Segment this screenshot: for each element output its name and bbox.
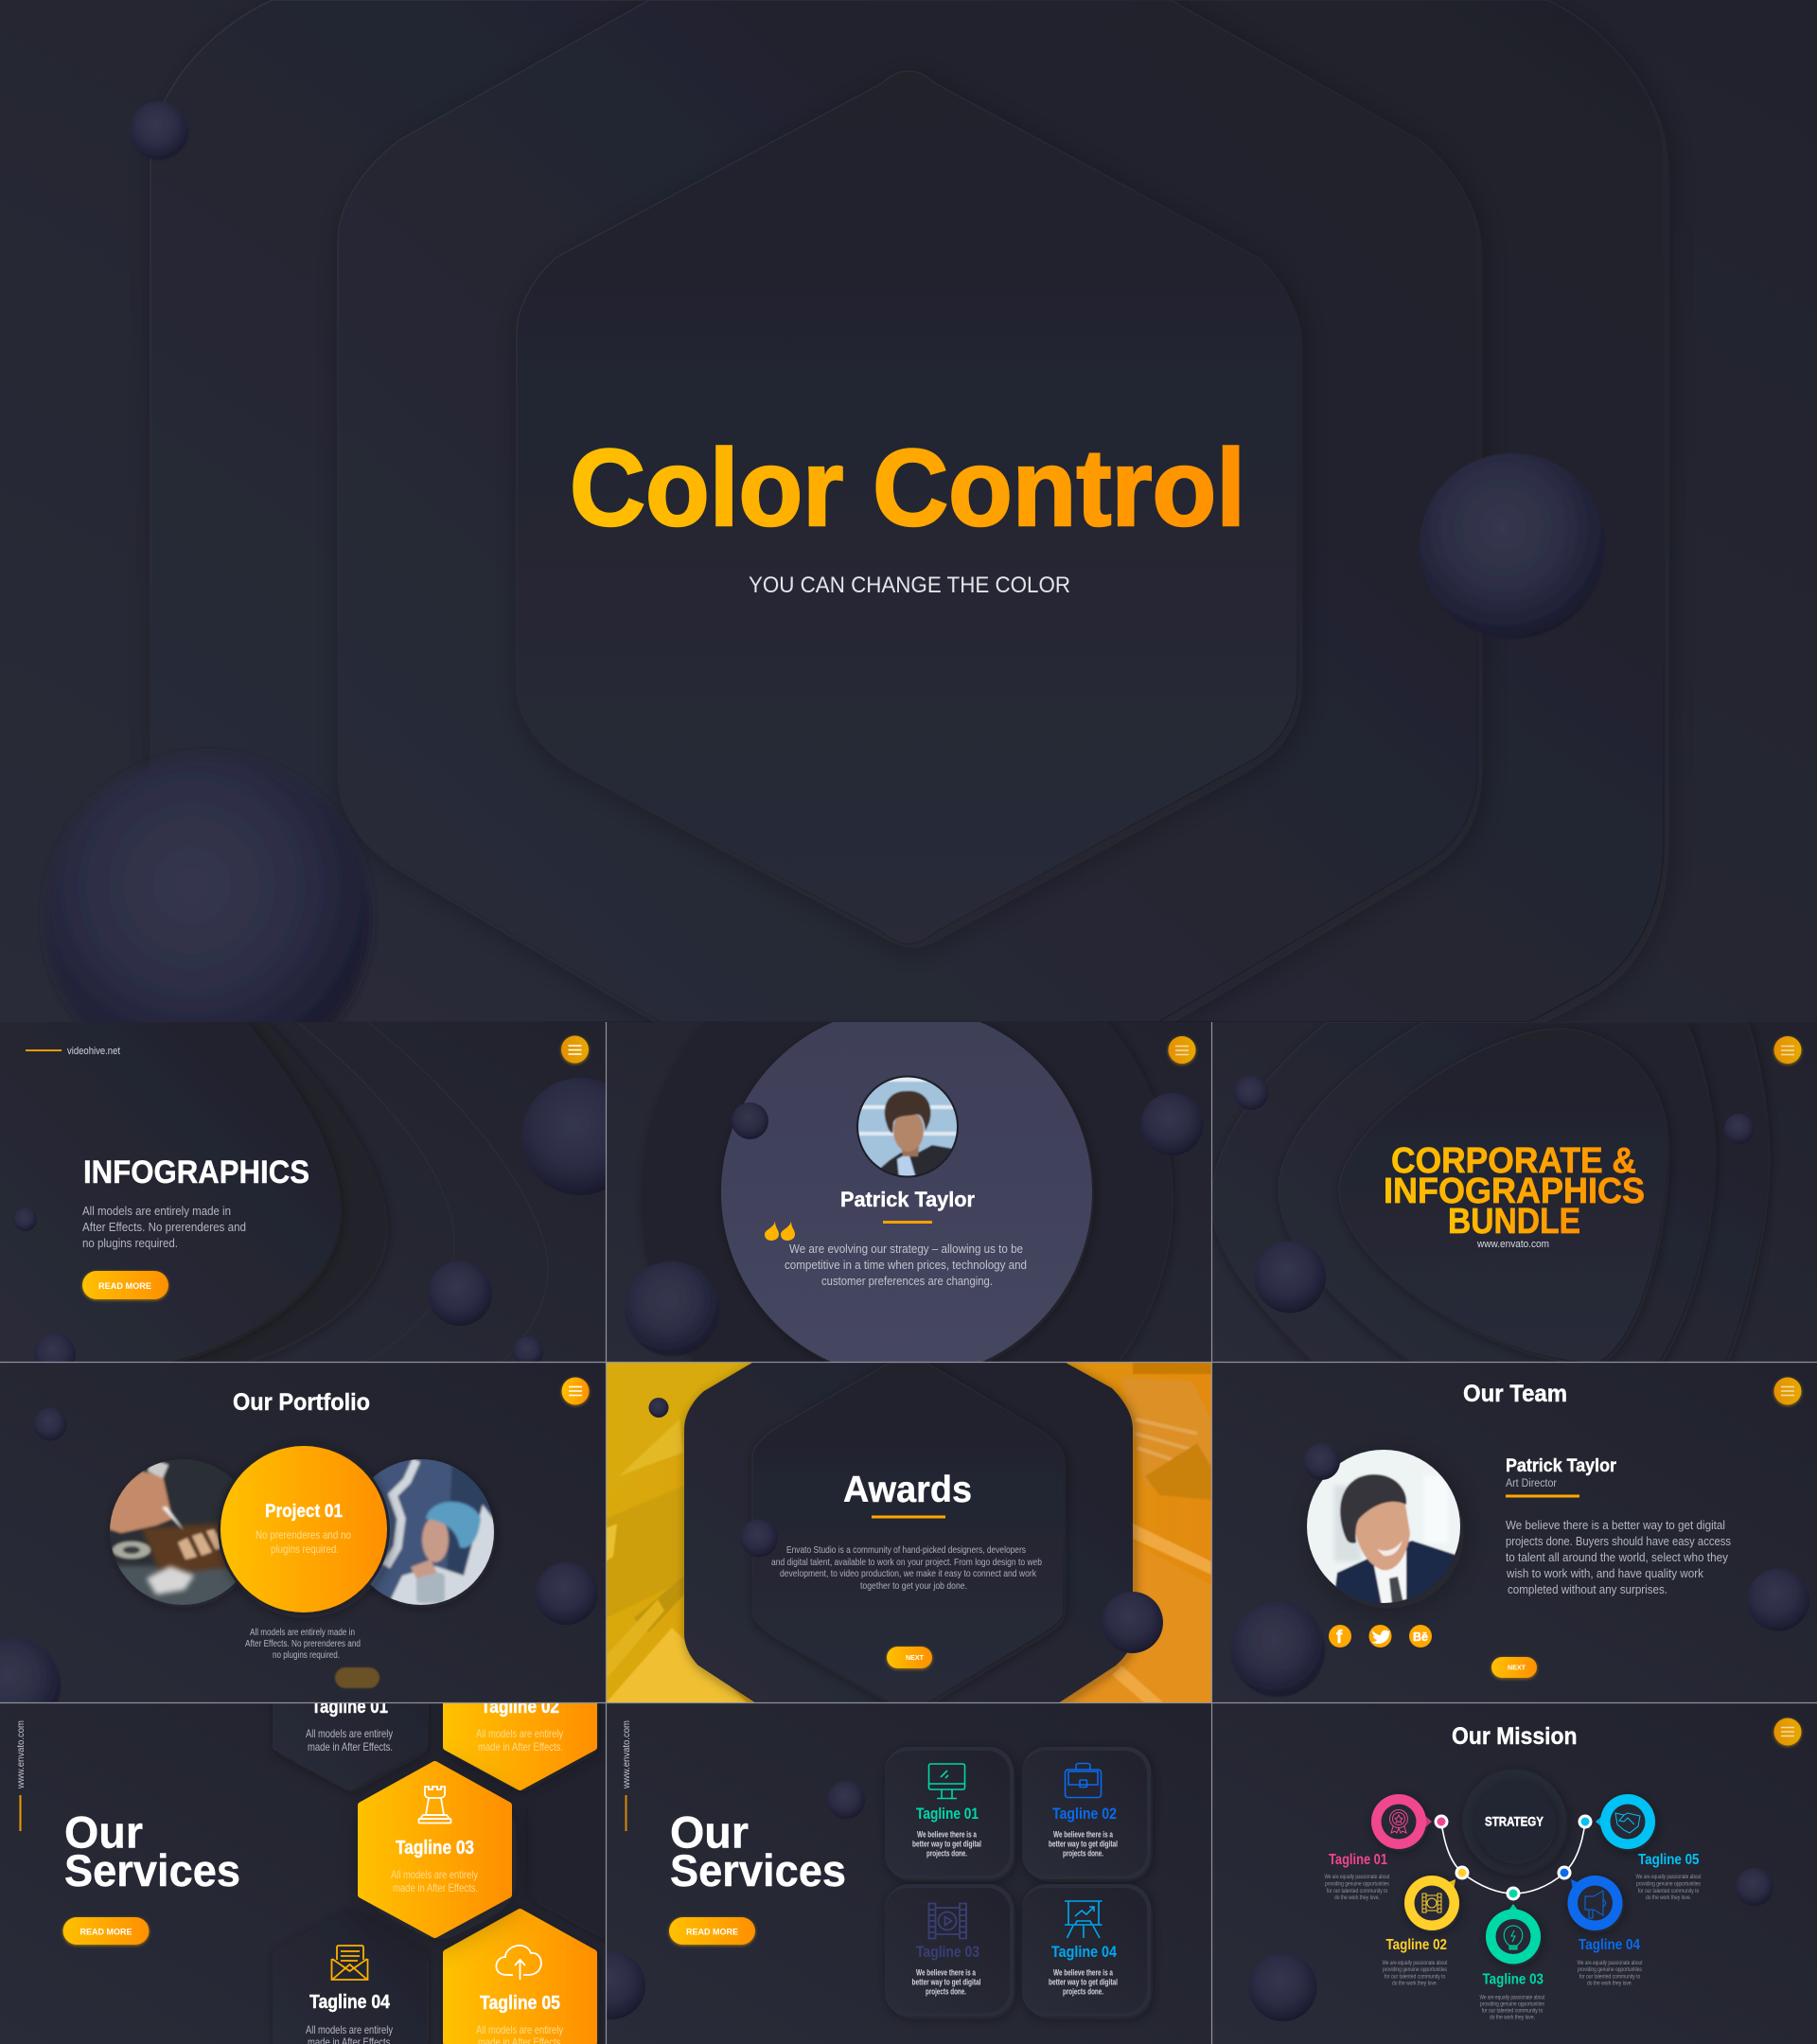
- bio: to talent all around the world, select who they: [1506, 1550, 1728, 1564]
- panel: team slide: [1213, 1376, 1808, 1701]
- headline: CORPORATE &: [1391, 1141, 1636, 1181]
- name: Patrick Taylor: [1506, 1456, 1617, 1476]
- icon: envelope: [331, 1946, 367, 1980]
- card 03: better way to get digital: [912, 1978, 980, 1987]
- icon: facebook: f: [1336, 1628, 1343, 1648]
- ring: tagline 03: [1486, 1904, 1541, 1965]
- card 04: projects done.: [1063, 1987, 1103, 1997]
- nodes: [1436, 1816, 1591, 1899]
- violet circle: [721, 1007, 1092, 1378]
- url: www.envato.com: [1476, 1239, 1549, 1250]
- vertical line: [19, 1795, 21, 1831]
- ring: tagline 05: [1596, 1794, 1655, 1849]
- inner hexagon layer: [517, 71, 1297, 944]
- panel: bundle slide: [1212, 1022, 1804, 1361]
- label: tagline 01: Tagline 01: [1329, 1852, 1387, 1868]
- heading: Awards: [843, 1470, 972, 1510]
- hexagon 01: made in After Effects.: [308, 1740, 393, 1753]
- outer hexagon: [684, 1363, 1133, 1703]
- label: tagline 05: for our talented community to: [1638, 1888, 1700, 1894]
- label: tagline 04: providing genuine opportunities: [1578, 1966, 1643, 1973]
- icon: award: [1389, 1809, 1408, 1833]
- hexagon 01: Tagline 01: [311, 1697, 388, 1718]
- menu button: [1168, 1036, 1196, 1064]
- quote text: competitive in a time when prices, technology and: [785, 1258, 1027, 1272]
- label: tagline 01: do the work they love.: [1334, 1894, 1380, 1901]
- label: tagline 01: We are equally passionate about: [1325, 1874, 1390, 1880]
- label: tagline 05: providing genuine opportunities: [1636, 1881, 1702, 1887]
- vertical line: [625, 1795, 626, 1831]
- hexagon 03: All models are entirely: [391, 1868, 478, 1881]
- card 04: [1022, 1884, 1151, 2017]
- heading: Our Portfolio: [233, 1389, 370, 1416]
- bio: We believe there is a better way to get digital: [1506, 1518, 1725, 1532]
- heading: Our: [64, 1807, 143, 1857]
- label: tagline 04: Tagline 04: [1579, 1937, 1640, 1953]
- next button: [1491, 1657, 1537, 1678]
- hexagon 02: [447, 1616, 593, 1787]
- icon: film: [929, 1904, 966, 1938]
- balls: [649, 1398, 1163, 1653]
- balls: [13, 1078, 639, 1375]
- ring: tagline 04: [1567, 1876, 1622, 1930]
- portrait: [856, 1075, 959, 1177]
- hexagon 02: All models are entirely: [476, 1727, 563, 1740]
- quote text: customer preferences are changing.: [821, 1274, 993, 1288]
- faded button: [335, 1667, 379, 1688]
- icon: monitor: [929, 1764, 965, 1798]
- menu button: [1773, 1378, 1802, 1404]
- card 01: Tagline 01: [916, 1805, 979, 1823]
- label: tagline 01: for our talented community to: [1327, 1888, 1388, 1894]
- hexagon 01: All models are entirely: [306, 1727, 393, 1740]
- title: Color Control: [570, 428, 1245, 549]
- heading: Services: [670, 1845, 846, 1895]
- ball over portrait: [1303, 1443, 1340, 1480]
- hexagon 05: All models are entirely: [476, 2023, 563, 2036]
- bio: projects done. Buyers should have easy access: [1506, 1534, 1731, 1548]
- panel: testimonial slide: [608, 1022, 1202, 1362]
- description: All models are entirely made in: [250, 1628, 355, 1638]
- label: tagline 02: [1382, 1937, 1448, 1987]
- photo background shapes: [606, 1363, 1211, 1703]
- body text: no plugins required.: [82, 1236, 178, 1250]
- panel: awards slide: [607, 1363, 1211, 1702]
- strategy hub: STRATEGY: [1485, 1813, 1544, 1828]
- icon: handshake: [1615, 1813, 1640, 1833]
- connector arc: [1441, 1822, 1585, 1894]
- inner blob: [1339, 1029, 1667, 1363]
- heading: [64, 1807, 240, 1895]
- headline: [1384, 1141, 1645, 1242]
- ring: tagline 02: [1404, 1876, 1459, 1930]
- icon: twitter: [1368, 1625, 1391, 1648]
- card 04: Tagline 04: [1051, 1943, 1117, 1961]
- hexagon: right dark: [532, 1765, 679, 1934]
- read more button: [62, 1917, 150, 1945]
- card 02: We believe there is a: [1053, 1830, 1114, 1840]
- card 01: We believe there is a: [917, 1830, 978, 1840]
- description: Envato Studio is a community of hand-picked designers, developers: [786, 1544, 1026, 1556]
- next button: [887, 1647, 932, 1668]
- hexagon 04: All models are entirely: [306, 2023, 393, 2036]
- body text: After Effects. No prerenderes and: [82, 1220, 246, 1234]
- icon: facebook: [1329, 1625, 1351, 1648]
- middle hexagon layer: [338, 0, 1477, 1022]
- description: together to get your job done.: [860, 1580, 967, 1592]
- heading: Our Mission: [1452, 1723, 1577, 1750]
- card 03: Tagline 03: [916, 1943, 979, 1961]
- menu button: [561, 1035, 589, 1064]
- label: tagline 01: providing genuine opportunities: [1325, 1881, 1390, 1887]
- label: tagline 04: We are equally passionate about: [1577, 1960, 1643, 1966]
- panel: services cards slide: [607, 1720, 1155, 2044]
- accent bar: [883, 1221, 932, 1224]
- menu button: [562, 1378, 589, 1404]
- headline: BUNDLE: [1448, 1202, 1580, 1242]
- description: [245, 1628, 361, 1661]
- icon: cloud upload: [496, 1946, 541, 1980]
- balls: [1230, 1569, 1809, 1697]
- heading: Our Team: [1463, 1381, 1567, 1407]
- accent bar: [1506, 1495, 1579, 1497]
- name: Patrick Taylor: [840, 1188, 975, 1211]
- bio: wish to work with, and have quality work: [1506, 1566, 1703, 1580]
- balls: [1234, 1076, 1755, 1313]
- label: tagline 03: for our talented community to: [1482, 2008, 1544, 2014]
- subtitle: YOU CAN CHANGE THE COLOR: [749, 573, 1070, 598]
- quote text: We are evolving our strategy – allowing us to be: [789, 1242, 1023, 1256]
- label: tagline 03: We are equally passionate about: [1480, 1995, 1545, 2000]
- label: tagline 05: Tagline 05: [1638, 1852, 1700, 1868]
- card 02: [1022, 1747, 1151, 1879]
- read more button: READ MORE: [686, 1927, 738, 1938]
- label: tagline 03: [1480, 1972, 1545, 2021]
- heading: [670, 1807, 846, 1895]
- hexagon 03: [362, 1765, 508, 1934]
- hexagon 03: made in After Effects.: [393, 1881, 478, 1894]
- card 01: projects done.: [926, 1849, 967, 1859]
- read more button: [669, 1917, 755, 1945]
- role: Art Director: [1506, 1478, 1557, 1489]
- panel: portfolio slide: [0, 1376, 596, 1702]
- description: no plugins required.: [273, 1650, 340, 1661]
- label: tagline 04: [1577, 1937, 1643, 1987]
- icon: behance: Bē: [1413, 1630, 1428, 1644]
- balls: [1249, 1868, 1773, 2021]
- blob band: [0, 1022, 386, 1363]
- quote mark: [765, 1221, 795, 1241]
- card 03: We believe there is a: [916, 1968, 977, 1978]
- card 04: We believe there is a: [1053, 1968, 1114, 1978]
- description: development, to video production, we make it easy to connect and work: [780, 1568, 1037, 1579]
- label: tagline 02: for our talented community to: [1385, 1974, 1446, 1980]
- read more button: READ MORE: [98, 1281, 151, 1292]
- panel: services hexagons slide: [0, 1697, 604, 2044]
- hexagon 05: Tagline 05: [480, 1993, 560, 2014]
- card 02: Tagline 02: [1052, 1805, 1117, 1823]
- hexagon 03: Tagline 03: [396, 1838, 474, 1859]
- left project photo: [110, 1459, 238, 1609]
- menu button: [1773, 1718, 1802, 1745]
- right project photo: [370, 1459, 496, 1609]
- site label: videohive.net: [67, 1046, 120, 1057]
- icon: behance: [1409, 1625, 1432, 1648]
- bottom left ball: [45, 755, 371, 1081]
- balls: [0, 1408, 598, 1733]
- panel: infographics slide: [0, 1022, 606, 1362]
- hexagon 02: made in After Effects.: [478, 1740, 563, 1753]
- menu button: [1773, 1036, 1802, 1064]
- label: tagline 04: for our talented community to: [1579, 1974, 1641, 1980]
- project circle: [218, 1443, 390, 1615]
- strategy hub: [1462, 1770, 1566, 1874]
- outer blob: [1211, 1022, 1768, 1363]
- next button: NEXT: [1508, 1664, 1526, 1671]
- project circle: plugins required.: [271, 1542, 339, 1556]
- card 02: better way to get digital: [1049, 1840, 1118, 1849]
- icon: bulb: [1504, 1926, 1523, 1949]
- label: tagline 05: [1635, 1852, 1702, 1901]
- card 01: better way to get digital: [912, 1840, 981, 1849]
- card 02: projects done.: [1063, 1849, 1103, 1859]
- bio: [1506, 1518, 1731, 1596]
- hexagon 04: Tagline 04: [309, 1992, 391, 2013]
- vertical url: www.envato.com: [621, 1720, 632, 1789]
- hexagon 04: [276, 1912, 423, 2044]
- icon: presentation board: [1065, 1901, 1102, 1938]
- card 04: better way to get digital: [1049, 1978, 1118, 1987]
- label: tagline 04: do the work they love.: [1587, 1980, 1632, 1987]
- label: tagline 02: do the work they love.: [1392, 1980, 1438, 1987]
- outer hexagon layer: [150, 0, 1664, 1022]
- label: tagline 03: do the work they love.: [1490, 2014, 1535, 2021]
- description: After Effects. No prerenderes and: [245, 1639, 361, 1649]
- card 03: projects done.: [926, 1987, 966, 1997]
- description: [771, 1544, 1042, 1592]
- label: tagline 03: providing genuine opportunities: [1480, 2000, 1545, 2008]
- label: tagline 01: [1325, 1852, 1390, 1901]
- label: tagline 02: We are equally passionate about: [1382, 1960, 1448, 1966]
- icon: rook: [418, 1787, 450, 1823]
- heading: INFOGRAPHICS: [83, 1154, 309, 1190]
- label: tagline 02: Tagline 02: [1385, 1937, 1447, 1953]
- contour lines: [297, 1022, 548, 1363]
- project circle: Project 01: [265, 1502, 343, 1522]
- icon: megaphone: [1585, 1891, 1605, 1918]
- label: tagline 05: We are equally passionate about: [1635, 1874, 1702, 1880]
- heading: Our: [670, 1807, 749, 1857]
- card 01: [885, 1747, 1014, 1879]
- middle blob: [1279, 1022, 1714, 1363]
- description: and digital talent, available to work on your project. From logo design to web: [771, 1557, 1042, 1568]
- inner hexagon: [752, 1363, 1064, 1703]
- project circle: No prerenderes and no: [256, 1528, 351, 1542]
- dark ring: [642, 927, 1172, 1467]
- panel: hero Color Control: [0, 0, 1664, 1022]
- team portrait: [1306, 1448, 1462, 1609]
- bio: completed without any surprises.: [1508, 1582, 1667, 1596]
- label: tagline 03: Tagline 03: [1482, 1972, 1544, 1987]
- next button: NEXT: [906, 1653, 924, 1662]
- icon: briefcase: [1066, 1764, 1102, 1798]
- quote text: [785, 1242, 1027, 1288]
- ring: tagline 01: [1371, 1794, 1432, 1849]
- panel: mission slide: [1213, 1717, 1804, 2044]
- right ball: [1420, 453, 1605, 639]
- hexagon 05: [447, 1912, 593, 2044]
- hexagon 02: Tagline 02: [481, 1697, 559, 1718]
- card 03: [885, 1884, 1014, 2017]
- accent bar: [872, 1516, 945, 1518]
- balls: [577, 1781, 865, 2019]
- read more button: [82, 1271, 168, 1299]
- site line: [26, 1049, 62, 1051]
- heading: Services: [64, 1845, 240, 1895]
- hexagon 01: [276, 1616, 423, 1787]
- balls: [625, 1093, 1204, 1356]
- body text: [82, 1204, 246, 1250]
- body text: All models are entirely made in: [82, 1204, 231, 1218]
- icon: film: [1422, 1894, 1441, 1912]
- headline: INFOGRAPHICS: [1384, 1172, 1645, 1211]
- vertical url: www.envato.com: [15, 1720, 26, 1789]
- label: tagline 05: do the work they love.: [1646, 1894, 1691, 1901]
- label: tagline 02: providing genuine opportunities: [1383, 1966, 1448, 1973]
- small ball: [130, 101, 188, 160]
- read more button: READ MORE: [79, 1927, 132, 1938]
- blob main: [0, 1022, 340, 1363]
